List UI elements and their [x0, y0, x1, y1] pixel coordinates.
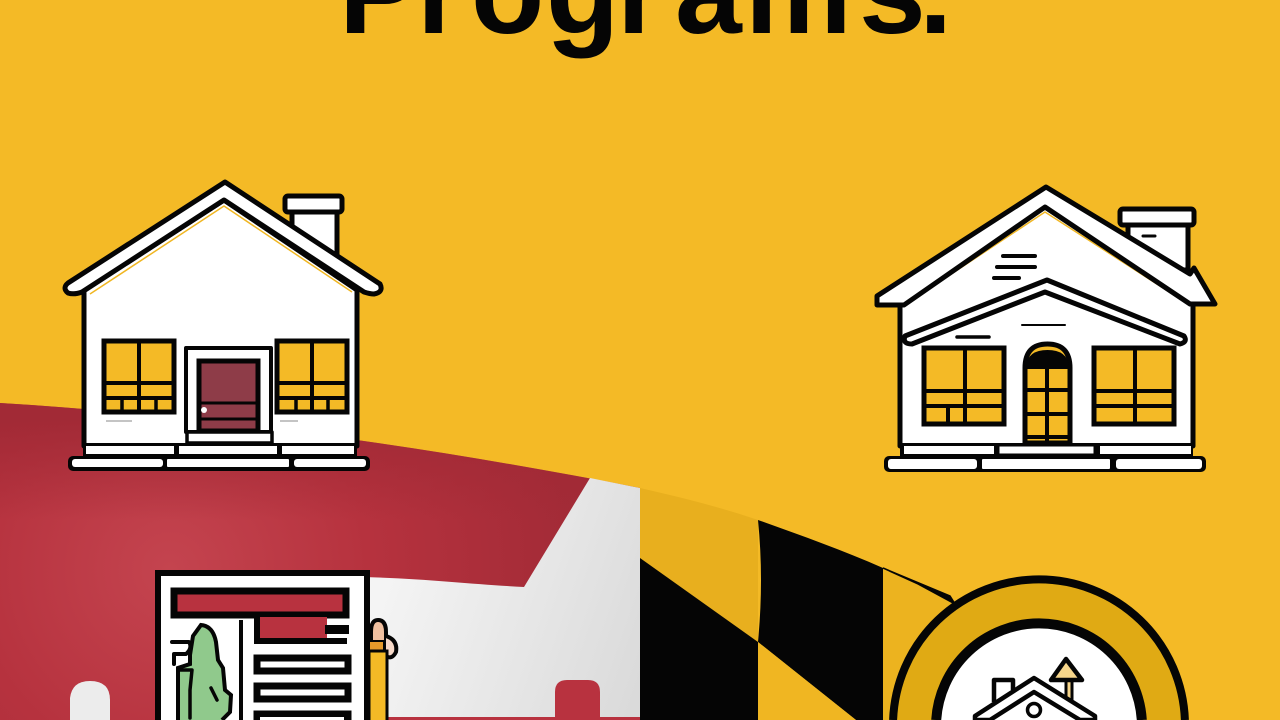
icon: round seal with house — [893, 579, 1185, 720]
steps and base — [884, 443, 1206, 472]
flag: white quarter — [70, 478, 640, 720]
left window — [924, 348, 1004, 424]
column divider — [239, 620, 243, 720]
left window — [104, 341, 174, 412]
Maryland flag banner — [0, 403, 955, 720]
faint marks — [106, 420, 298, 422]
icon: white house left — [65, 182, 381, 471]
steps and base — [68, 432, 370, 471]
chimney — [1120, 209, 1194, 270]
right window — [1094, 348, 1174, 424]
seal inner disc — [936, 623, 1142, 720]
flag: red quarter — [0, 403, 640, 720]
pencil — [369, 620, 396, 720]
porch roof — [904, 280, 1185, 344]
page — [158, 573, 367, 720]
seal ring — [893, 579, 1185, 720]
green map of state — [172, 625, 231, 720]
text lines — [254, 658, 352, 720]
flag: yellow and black quarter — [640, 488, 955, 720]
red header bar — [174, 591, 346, 615]
walls — [84, 200, 357, 446]
small house — [975, 659, 1095, 720]
gable marks — [994, 256, 1035, 278]
door — [186, 348, 271, 432]
icon: application document with pencil — [158, 573, 396, 720]
roof — [877, 187, 1215, 305]
icon: porch house right — [877, 187, 1215, 472]
chimney — [285, 196, 342, 255]
roof — [65, 182, 381, 294]
walls — [900, 207, 1193, 446]
right window — [277, 341, 347, 412]
red sub-header block — [257, 617, 349, 641]
arched door — [1025, 344, 1070, 443]
